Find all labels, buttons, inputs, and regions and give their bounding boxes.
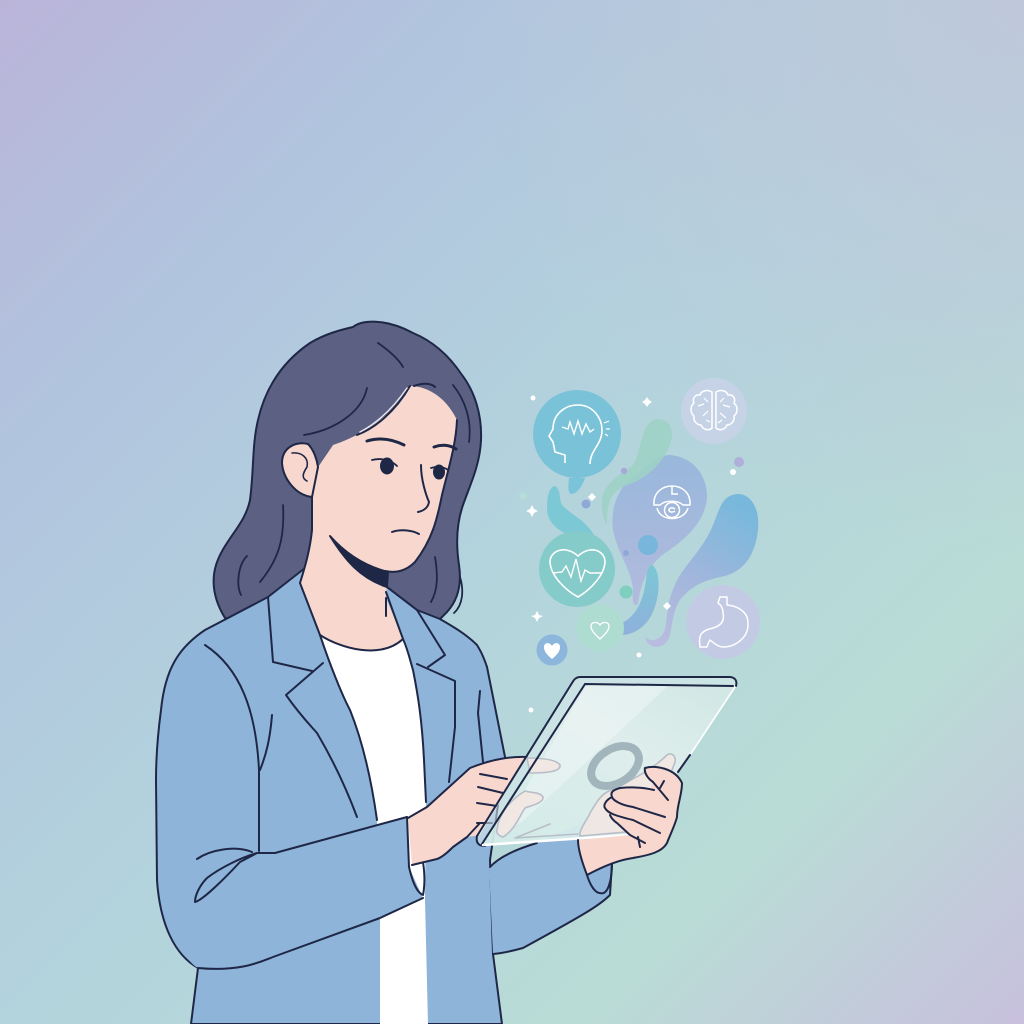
hand seen through glass <box>497 754 675 838</box>
blob: right blue wave <box>645 494 758 647</box>
eyes <box>372 459 397 466</box>
ring on screen <box>584 738 646 794</box>
screen sheen <box>498 686 668 836</box>
blob: teal left wave <box>547 486 594 535</box>
tablet <box>477 677 736 846</box>
icon: brain circle <box>681 378 747 444</box>
blob: green wave <box>602 419 672 525</box>
chin shadow <box>330 536 388 587</box>
right sleeve <box>489 822 612 954</box>
floating health icons <box>519 378 760 712</box>
neck <box>300 500 403 650</box>
left hand <box>408 757 527 865</box>
jacket base <box>156 568 505 1024</box>
ear <box>282 443 318 497</box>
brows <box>367 439 404 445</box>
nose <box>418 465 429 512</box>
jacket and collar lines <box>205 583 483 851</box>
blob: central lavender <box>612 455 707 605</box>
mouth <box>392 530 419 534</box>
icon: eye <box>654 486 690 518</box>
illustration: woman <box>156 322 736 1024</box>
blob: lower teal wave <box>610 565 659 635</box>
icon: small heart circle <box>576 604 624 652</box>
glass screen <box>482 684 734 844</box>
icon: blue heart badge <box>536 634 568 666</box>
decorative dots and sparkles <box>519 396 744 712</box>
right hand <box>578 767 682 875</box>
hair <box>214 322 481 619</box>
face <box>282 384 457 587</box>
white shirt <box>320 635 428 1024</box>
icon: stomach circle <box>686 585 760 659</box>
left sleeve <box>175 817 424 969</box>
icon: heart with pulse <box>539 531 615 607</box>
icon: head with brain waves <box>533 390 621 494</box>
